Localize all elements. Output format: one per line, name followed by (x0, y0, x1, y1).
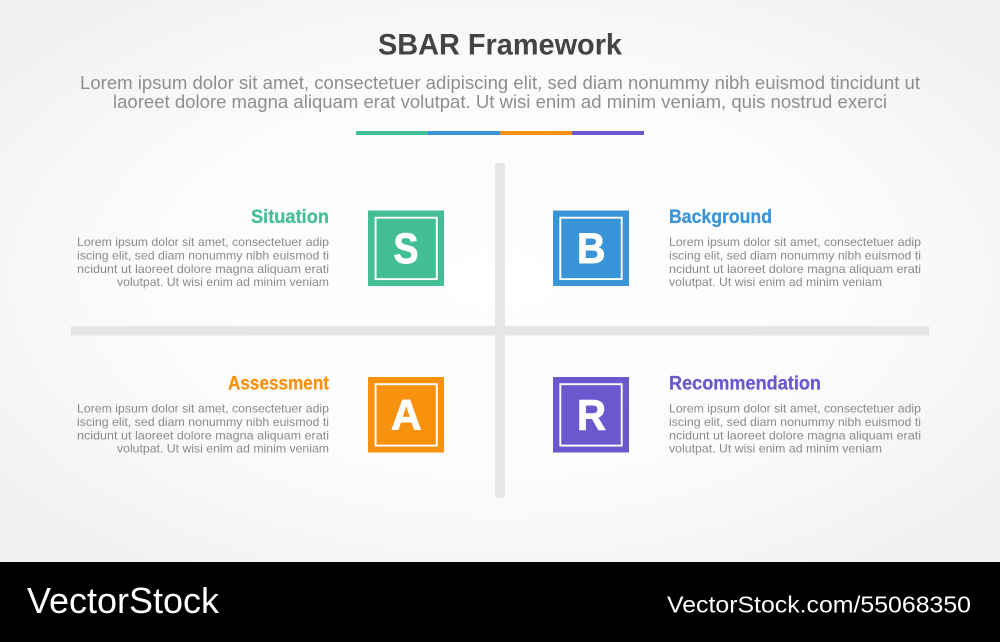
footer url: VectorStock.com/55068350 (667, 592, 971, 618)
text block: situation: ncidunt ut laoreet dolore magna aliquam erati (77, 262, 329, 276)
text block: background: ncidunt ut laoreet dolore magna aliquam erati (669, 262, 921, 276)
text block: situation (77, 235, 329, 289)
text block: background: Lorem ipsum dolor sit amet, consectetuer adip (669, 235, 921, 249)
icon: B square (553, 210, 629, 286)
text block: background: volutpat. Ut wisi enim ad minim veniam (669, 275, 882, 289)
text block: assessment: iscing elit, sed diam nonummy nibh euismod ti (77, 415, 329, 429)
text block: situation: volutpat. Ut wisi enim ad minim veniam (117, 275, 329, 289)
subtitle (80, 72, 920, 112)
text block: recommendation (669, 402, 921, 456)
icon: S square (368, 210, 444, 286)
multicolour underline (356, 131, 644, 135)
text block: background: iscing elit, sed diam nonummy nibh euismod ti (669, 248, 921, 262)
panel: recommendation (553, 374, 921, 456)
text block: assessment: ncidunt ut laoreet dolore magna aliquam erati (77, 428, 329, 442)
heading: background: Background (669, 207, 772, 228)
text block: assessment: volutpat. Ut wisi enim ad minim veniam (117, 442, 329, 456)
icon: A square: A (391, 392, 422, 440)
heading: assessment: Assessment (228, 374, 330, 394)
heading: situation: Situation (251, 207, 329, 228)
footer logo text: VectorStock (27, 580, 220, 621)
icon: S square: S (394, 226, 418, 273)
icon: R square (553, 377, 629, 452)
text block: recommendation: volutpat. Ut wisi enim ad minim veniam (669, 442, 882, 456)
subtitle: laoreet dolore magna aliquam erat volutpat. Ut wisi enim ad minim veniam, quis nostrud exerci (113, 91, 887, 112)
text block: situation: Lorem ipsum dolor sit amet, consectetuer adip (77, 235, 329, 249)
icon: R square: R (577, 392, 606, 440)
heading: recommendation: Recommendation (669, 374, 821, 394)
icon: A square (368, 377, 444, 452)
footer: watermark bar (0, 562, 1000, 642)
text block: assessment: Lorem ipsum dolor sit amet, consectetuer adip (77, 402, 329, 416)
panel: assessment (77, 374, 444, 456)
text block: assessment (77, 402, 329, 456)
vertical divider (495, 163, 505, 498)
text block: recommendation: iscing elit, sed diam nonummy nibh euismod ti (669, 415, 921, 429)
horizontal divider (71, 326, 929, 336)
text block: recommendation: ncidunt ut laoreet dolore magna aliquam erati (669, 428, 921, 442)
panel: background (553, 207, 921, 289)
text block: recommendation: Lorem ipsum dolor sit amet, consectetuer adip (669, 402, 921, 416)
text block: background (669, 235, 921, 289)
icon: B square: B (577, 226, 606, 273)
text block: situation: iscing elit, sed diam nonummy nibh euismod ti (77, 248, 329, 262)
title: SBAR Framework (378, 28, 622, 62)
subtitle: Lorem ipsum dolor sit amet, consectetuer adipiscing elit, sed diam nonummy nibh euismod tincidunt ut (80, 72, 920, 93)
panel: situation (77, 207, 444, 289)
